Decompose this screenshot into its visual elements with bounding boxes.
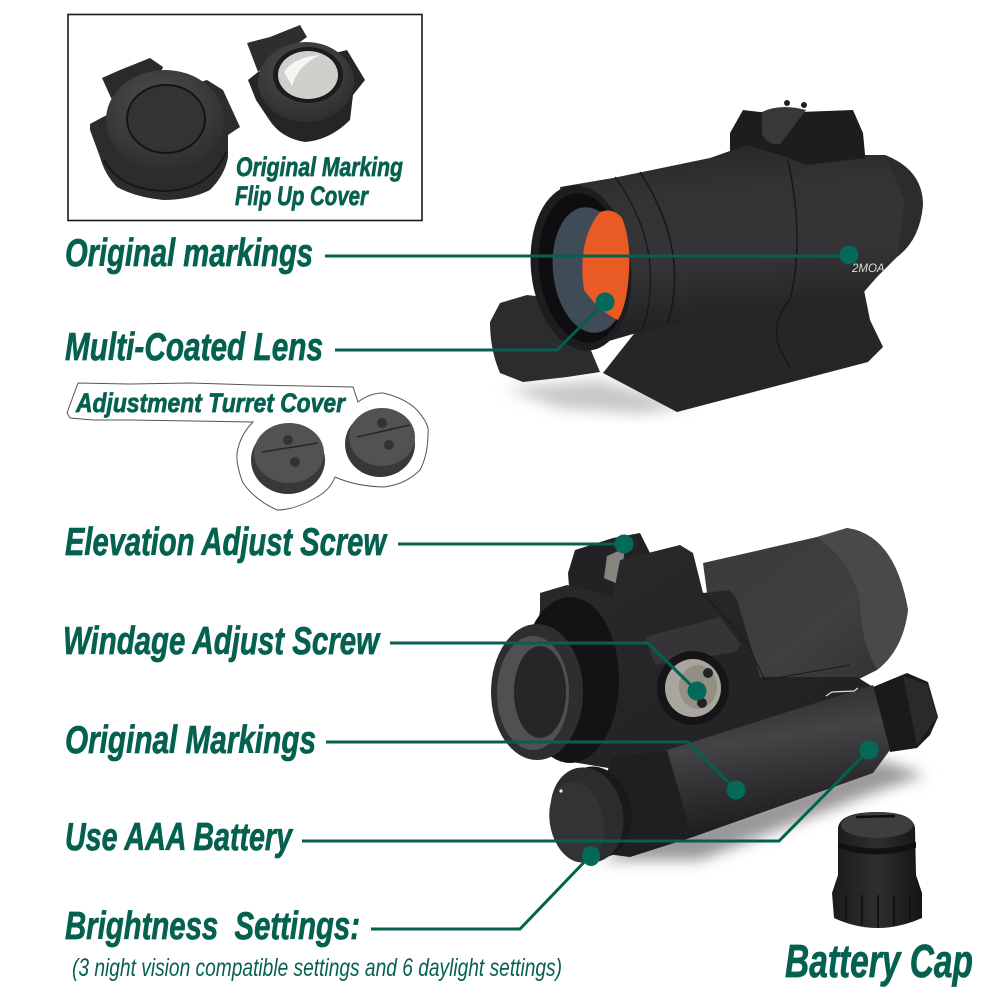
label: use AAA battery: Use AAA Battery — [65, 816, 294, 859]
icon: rear cylinder — [703, 528, 908, 690]
label: multi-coated lens: Multi-Coated Lens — [65, 326, 323, 369]
text: flip cover caption: Original Marking — [236, 152, 403, 182]
illustration: bottom red dot sight — [491, 528, 938, 869]
icon: closed flip cover — [90, 58, 240, 200]
icon: front lens — [523, 180, 639, 356]
icon: turret cap right — [345, 408, 415, 477]
panel: flip up cover inset — [68, 14, 422, 220]
icon: rear cylinder — [860, 155, 923, 280]
icon: scope body — [560, 145, 905, 348]
label: use AAA battery — [65, 740, 878, 859]
icon: brightness knob — [542, 760, 640, 869]
icon: open flip cover — [247, 25, 365, 142]
icon: windage screw — [657, 651, 729, 725]
icon: rear turret post — [568, 533, 650, 600]
text: flip cover caption — [235, 152, 403, 211]
icon: battery compartment tube — [575, 673, 938, 857]
icon: side battery tube — [490, 295, 600, 382]
label: brightness settings — [65, 846, 600, 948]
panel: adjustment turret cover sticker — [67, 383, 428, 510]
text: sticker heading: Adjustment Turret Cover — [75, 388, 346, 418]
text: flip cover caption: Flip Up Cover — [235, 181, 369, 211]
label: windage adjust screw: Windage Adjust Screw — [63, 620, 381, 663]
label: original markings — [65, 232, 858, 275]
illustration: top red dot sight — [490, 100, 923, 414]
label: multi-coated lens — [65, 292, 614, 369]
text: brightness detail note: (3 night vision compatible settings and 6 daylight settings) — [72, 954, 562, 982]
label: original markings lower: Original Markings — [65, 719, 316, 762]
icon: top turret mount — [730, 100, 866, 185]
icon: battery cap — [832, 812, 922, 928]
label: original markings lower — [65, 719, 746, 800]
label: elevation adjust screw: Elevation Adjust Screw — [65, 521, 388, 564]
icon: threaded front ring — [491, 597, 619, 763]
icon: turret cap left — [251, 423, 325, 494]
text: 2MOA engraving: 2MOA — [851, 263, 885, 275]
label: windage adjust screw — [63, 620, 706, 700]
icon: main housing — [530, 545, 873, 770]
label: brightness settings: Brightness Settings: — [65, 905, 360, 948]
label: original markings: Original markings — [65, 232, 313, 275]
icon: mount base — [603, 285, 883, 412]
